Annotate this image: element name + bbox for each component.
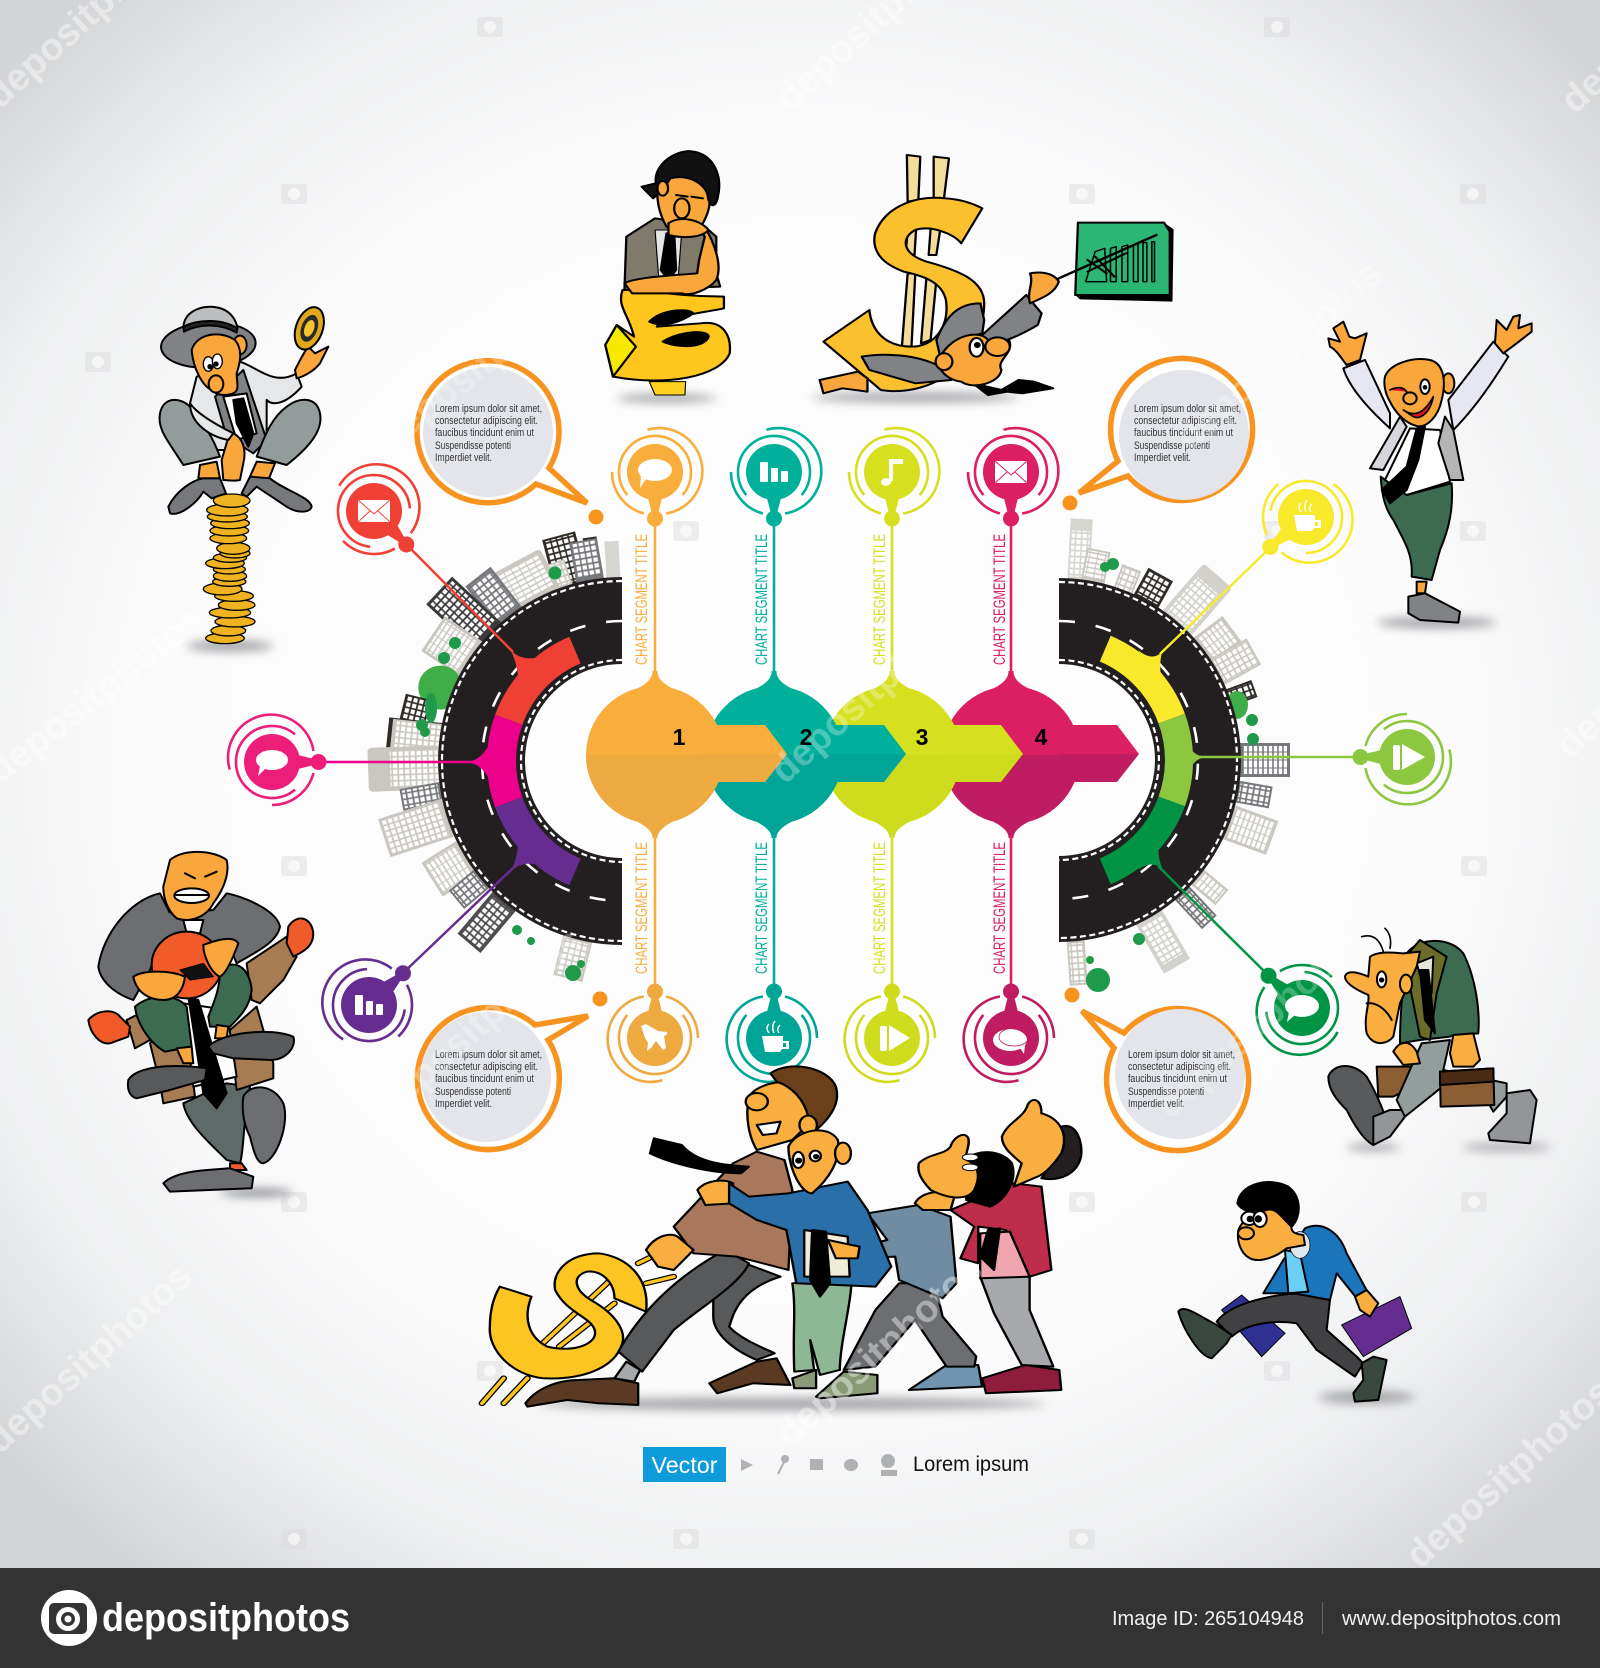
connector: purple — [402, 832, 541, 974]
chart segment titles: CHART SEGMENT TITLE — [632, 842, 651, 974]
road band: red — [495, 637, 581, 725]
icon: play light green — [1352, 714, 1451, 804]
cartoon: two fighting men — [88, 852, 313, 1197]
speech bubble: bottom right: faucibus tincidunt enim ut — [1128, 1073, 1227, 1085]
speech bubble: bottom left: Suspendisse potenti — [435, 1086, 511, 1098]
step numbers — [673, 724, 1048, 750]
connector: green — [1138, 835, 1268, 975]
speech bubble: bottom right: Suspendisse potenti — [1128, 1086, 1204, 1098]
speech bubble: top left: consectetur adipiscing elit. — [435, 415, 538, 427]
icon: plane bottom orange — [608, 984, 698, 1082]
speech bubble: top right: consectetur adipiscing elit. — [1134, 415, 1237, 427]
speech bubble: top right: Lorem ipsum dolor sit amet, — [1134, 403, 1241, 415]
speech bubble: bottom right: consectetur adipiscing elit. — [1128, 1061, 1231, 1073]
trees left — [416, 566, 585, 981]
speech bubble: top left: Lorem ipsum dolor sit amet, — [435, 403, 542, 415]
speech bubble: bottom left — [417, 992, 608, 1150]
vector badge — [643, 1447, 726, 1482]
diagonal stock watermarks: depositphotos — [368, 920, 591, 1127]
cartoon: dollar sign with crawling man and chart board — [812, 155, 1174, 403]
chart segment titles: CHART SEGMENT TITLE — [870, 534, 889, 665]
speech bubble: bottom right: Imperdiet velit. — [1128, 1098, 1185, 1110]
cartoon: cheering man — [1328, 315, 1532, 629]
cartoon: tired man with suitcases — [1328, 928, 1552, 1151]
chart segment titles: CHART SEGMENT TITLE — [990, 842, 1009, 974]
icon: chat pink — [228, 715, 326, 805]
city left — [367, 531, 620, 982]
footer logo — [41, 1590, 350, 1646]
diagonal stock watermarks: depositphotos — [768, 1248, 991, 1455]
chart segment titles: CHART SEGMENT TITLE — [632, 534, 651, 665]
trees right — [1086, 558, 1259, 992]
step numbers: 1 — [673, 724, 686, 750]
cartoon: group pulling the dollar sign — [482, 1066, 1081, 1411]
stems — [655, 518, 1011, 992]
footer bar — [0, 1568, 1600, 1668]
speech bubble: bottom left: Imperdiet velit. — [435, 1098, 492, 1110]
chart segment titles: CHART SEGMENT TITLE — [990, 534, 1009, 665]
icon: mail red — [313, 446, 446, 580]
cartoon: thinking man on S — [605, 151, 730, 403]
icon: chat bottom magenta — [964, 984, 1054, 1082]
diagonal stock watermarks: depositphotos — [1148, 920, 1371, 1127]
chart segment titles — [632, 534, 1009, 974]
footer image id: Image ID: 265104948 — [1112, 1608, 1304, 1630]
icon: speech top orange — [612, 428, 702, 526]
caption: Lorem ipsum — [913, 1453, 1029, 1476]
icon: mail top magenta — [968, 428, 1058, 526]
cartoon: man on coin stack — [159, 303, 329, 652]
icon: music top lime — [849, 428, 939, 526]
vector badge: Vector — [652, 1452, 718, 1478]
step 2 teal circle and arrow — [705, 671, 906, 838]
step 3 lime circle and arrow — [823, 671, 1023, 838]
icon: bars purple — [305, 933, 438, 1066]
footer logo: depositphotos — [102, 1596, 350, 1640]
speech bubble: bottom left: consectetur adipiscing elit. — [435, 1061, 538, 1073]
cartoon: running businessman — [1178, 1182, 1415, 1404]
icon: play bottom lime — [845, 984, 935, 1082]
speech bubble: top left: faucibus tincidunt enim ut — [435, 427, 534, 439]
connector: red — [407, 545, 541, 690]
road band: purple — [495, 797, 581, 885]
footer url: www.depositphotos.com — [1341, 1608, 1561, 1630]
diagonal stock watermarks: depositphotos — [763, 585, 986, 792]
road band: pink — [487, 715, 522, 807]
speech bubble: top right: faucibus tincidunt enim ut — [1134, 427, 1233, 439]
diagonal stock watermarks: depositphotos — [1168, 252, 1391, 459]
icon: coffee yellow — [1237, 456, 1370, 588]
road: right half ring — [1059, 578, 1241, 942]
step 4 magenta circle and arrow — [942, 671, 1139, 838]
chart segment titles: CHART SEGMENT TITLE — [870, 842, 889, 974]
road: left half ring — [438, 577, 622, 945]
road band: yellow — [1100, 636, 1185, 723]
step numbers: 3 — [916, 724, 928, 750]
connector: yellow — [1138, 545, 1273, 685]
connector: pink — [316, 738, 493, 785]
small grey icons — [741, 1454, 897, 1476]
step numbers: 4 — [1035, 724, 1048, 750]
chart segment titles: CHART SEGMENT TITLE — [752, 842, 771, 974]
icon: coffee bottom teal — [727, 984, 817, 1082]
connector: light green — [1183, 735, 1360, 782]
step numbers: 2 — [800, 724, 812, 750]
speech bubble: top right: Imperdiet velit. — [1134, 452, 1191, 464]
step 1 orange circle and arrow — [586, 671, 787, 838]
speech bubble: top left: Imperdiet velit. — [435, 452, 492, 464]
speech bubble: top left: Suspendisse potenti — [435, 440, 511, 452]
speech bubble: top left — [417, 361, 604, 524]
city right — [1067, 518, 1290, 986]
speech bubble: top right — [1062, 358, 1253, 510]
speech bubble: top right: Suspendisse potenti — [1134, 440, 1210, 452]
diagonal stock watermarks: depositphotos — [370, 265, 602, 459]
chart segment titles: CHART SEGMENT TITLE — [752, 534, 771, 665]
road band: green — [1100, 797, 1185, 884]
speech bubble: bottom right — [1064, 988, 1249, 1151]
road band: light green — [1158, 714, 1193, 806]
speech bubble: bottom left: Lorem ipsum dolor sit amet, — [435, 1049, 542, 1061]
icon: bars top teal — [731, 428, 821, 526]
speech bubble: bottom left: faucibus tincidunt enim ut — [435, 1073, 534, 1085]
speech bubble: bottom right: Lorem ipsum dolor sit amet, — [1128, 1049, 1235, 1061]
icon: chat green — [1230, 939, 1363, 1073]
footer divider — [1322, 1602, 1323, 1634]
